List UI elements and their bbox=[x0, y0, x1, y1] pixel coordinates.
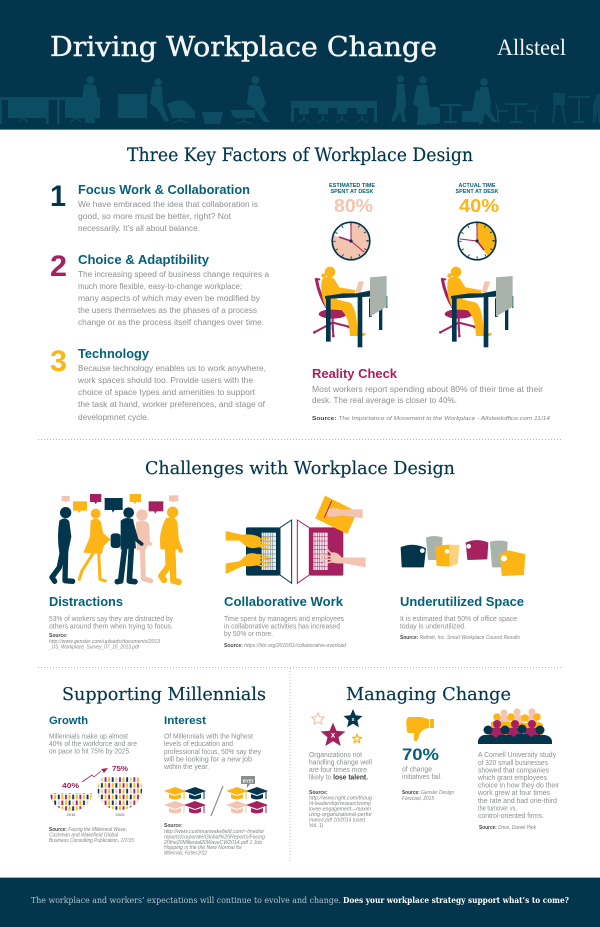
cornell text: choice in how they do their bbox=[478, 782, 560, 790]
interest text bbox=[163, 734, 261, 771]
70% figure: 70% bbox=[402, 745, 439, 764]
change initiatives panel bbox=[402, 717, 454, 802]
heading: three key factors: Three Key Factors of Workplace Design bbox=[127, 145, 473, 166]
illustration: laptops and hands bbox=[226, 496, 366, 583]
cornell text: A Cornell University study bbox=[478, 752, 556, 759]
change source: Forecast, 2015 bbox=[402, 796, 434, 802]
navy person one bbox=[52, 507, 73, 581]
underutilized text bbox=[400, 616, 517, 630]
factor 3 text: Because technology enables us to work anywhere, bbox=[78, 364, 266, 373]
navy person three bbox=[111, 507, 142, 582]
interest text: within the year. bbox=[163, 764, 209, 771]
talent source: Vol. 1) bbox=[309, 823, 324, 829]
interest source: 20the20Millenial20WaveCW2014.pdf 1 Job bbox=[163, 840, 262, 846]
change source bbox=[402, 790, 454, 802]
icon: thumbs down bbox=[406, 717, 434, 741]
factor 3 heading: Technology bbox=[78, 346, 150, 361]
growth source: Cushman and Wakefield Global bbox=[49, 832, 119, 838]
factor 3 text: work spaces should too. Provide users with the bbox=[77, 376, 254, 385]
factor 1 bbox=[50, 180, 258, 233]
distractions heading: Distractions bbox=[49, 594, 123, 609]
underutilized space panel bbox=[400, 537, 525, 641]
clock 40% bbox=[458, 222, 496, 260]
estimated label bbox=[329, 183, 376, 195]
underutilized text: It is estimated that 50% of office space bbox=[400, 616, 517, 623]
talent text bbox=[309, 752, 372, 782]
cornell text: of 320 small businesses bbox=[478, 760, 548, 767]
interest panel bbox=[163, 715, 268, 857]
cornell source: Source: Drive, Daniel Pink bbox=[479, 825, 536, 831]
growth text: 40% of the workforce and are bbox=[49, 741, 137, 748]
interest heading: Interest bbox=[164, 715, 206, 727]
number 3: 3 bbox=[50, 345, 67, 378]
growth source: Business Consulting Publication, 1/7/15 bbox=[49, 838, 134, 844]
collaborative source: Source: https://hbr.org/2016/01/collaborative-overload bbox=[224, 643, 346, 649]
factor 2 text: The increasing speed of business change requires a bbox=[78, 270, 270, 279]
distractions panel bbox=[48, 494, 181, 650]
reality check source: Source: The Importance of Movement in the Workplace - Allsteeloffice.com 11/14 bbox=[312, 416, 550, 422]
icon: stars bbox=[312, 709, 362, 746]
cornell text: the rate and had one-third bbox=[478, 798, 557, 805]
number 1: 1 bbox=[50, 180, 66, 213]
estimated label: SPENT AT DESK bbox=[330, 189, 374, 195]
chart: millennials share of workforce: 75% bbox=[112, 766, 129, 773]
talent source bbox=[309, 790, 372, 829]
factor 2 text bbox=[78, 270, 270, 327]
logo: Allsteel bbox=[497, 35, 566, 60]
factor 1 text: necessarily. It’s all about balance. bbox=[78, 224, 200, 233]
reality check text bbox=[312, 385, 543, 405]
reality check bbox=[312, 366, 550, 422]
chart: millennials share of workforce: 2016 bbox=[67, 812, 76, 817]
interest source: reports/corporate/Global%20Reports/Facing bbox=[164, 834, 265, 840]
collaborative text: Time spent by managers and employees bbox=[224, 616, 344, 623]
distractions source: http://www.gensler.com/uploads/documents/2013 bbox=[49, 639, 160, 645]
interest source: http://www.cushmanwakefield.com/~/media/ bbox=[164, 829, 265, 835]
distractions source bbox=[48, 633, 160, 650]
reality check text: Most workers report spending about 80% of their time at their bbox=[312, 385, 543, 394]
factor 2 text: many aspects of which may even be modified by bbox=[78, 294, 260, 303]
icon: graduation caps bbox=[164, 776, 268, 816]
footer band bbox=[0, 877, 600, 927]
estimated time panel bbox=[313, 183, 387, 347]
talent source: loyee-engagement---maxim bbox=[309, 806, 371, 812]
collaborative text: in collaborative activities has increased bbox=[224, 624, 340, 630]
cornell text: the turnover vs. bbox=[478, 806, 517, 812]
factor 1 text: We have embraced the idea that collaboration is bbox=[78, 200, 258, 209]
growth source bbox=[49, 827, 134, 844]
talent source: http://www.right.com/thoug bbox=[309, 796, 372, 802]
pink person bbox=[136, 509, 151, 581]
cornell text bbox=[477, 752, 560, 820]
change source: Source: Gensler Design bbox=[402, 790, 454, 796]
cornell text: control-oriented firms. bbox=[478, 813, 544, 820]
collaborative text bbox=[224, 616, 344, 638]
collaborative heading: Collaborative Work bbox=[224, 594, 344, 609]
talent text: are four times more bbox=[309, 767, 367, 774]
factor 1 text bbox=[78, 200, 258, 233]
icon: graduation caps: BYE! bbox=[243, 778, 254, 784]
illustration: furniture cubes bbox=[401, 537, 525, 575]
talent source: Source: bbox=[309, 790, 328, 796]
chart: millennials share of workforce: 2025 bbox=[116, 812, 125, 817]
growth text: Millennials make up almost bbox=[49, 734, 128, 740]
factor 2 text: change or as the process itself changes over time. bbox=[78, 318, 264, 327]
factor 3 text bbox=[77, 364, 266, 422]
factor 2 text: the users themselves as the phases of a process bbox=[78, 306, 257, 315]
heading: supporting millennials: Supporting Millennials bbox=[62, 684, 266, 705]
80% figure: 80% bbox=[334, 196, 373, 216]
talent text: handling change well bbox=[309, 760, 372, 766]
factor 2 heading: Choice & Adaptibility bbox=[78, 252, 210, 267]
icon: stars: x bbox=[331, 730, 336, 740]
talent source: izing-organizational-perfor bbox=[309, 812, 372, 818]
heading: challenges: Challenges with Workplace Design bbox=[145, 458, 455, 479]
factor 2 bbox=[50, 250, 270, 327]
change text bbox=[402, 766, 442, 781]
clock 80% bbox=[332, 222, 370, 260]
title: Driving Workplace Change bbox=[50, 31, 437, 63]
talent panel bbox=[309, 709, 372, 829]
cornell text: which grant employees bbox=[477, 775, 547, 782]
factor 3 text: choice of space types and amenities to support bbox=[78, 388, 256, 397]
orange person two bbox=[79, 509, 111, 581]
icon: crowd bbox=[478, 708, 552, 744]
growth text: on pace to hit 75% by 2025. bbox=[49, 748, 131, 756]
underutilized text: today is underutilized. bbox=[400, 624, 466, 630]
actual label: ACTUAL TIME bbox=[458, 183, 496, 189]
footer question: Does your workplace strategy support what’s to come? bbox=[343, 895, 569, 905]
underutilized heading: Underutilized Space bbox=[400, 594, 524, 609]
growth source: Source: Facing the Millennial Wave, bbox=[49, 827, 127, 833]
footer statement: The workplace and workers’ expectations will continue to evolve and change. bbox=[31, 896, 341, 905]
growth heading: Growth bbox=[49, 715, 88, 727]
factor 2 text: much more flexible, easy-to-change workplace; bbox=[78, 282, 242, 291]
talent text: Organizations not bbox=[309, 752, 362, 759]
interest text: will be looking for a new job bbox=[163, 756, 252, 764]
actual label: SPENT AT DESK bbox=[456, 189, 499, 195]
worker figure bbox=[439, 267, 513, 347]
header band bbox=[0, 0, 600, 130]
heading: managing change: Managing Change bbox=[346, 684, 511, 705]
cornell text: showed that companies bbox=[478, 768, 549, 774]
talent text: likely to lose talent. bbox=[309, 774, 368, 782]
change text: of change bbox=[402, 766, 432, 774]
distractions text: others around them when trying to focus. bbox=[49, 624, 173, 630]
chart: millennials share of workforce: 40% bbox=[62, 783, 80, 790]
factor 1 text: good, so more must be better, right? Not bbox=[78, 212, 232, 221]
distractions source: _US_Workplace_Survey_07_15_2013.pdf bbox=[48, 644, 140, 650]
interest text: professional focus, 50% say they bbox=[164, 749, 261, 756]
factor 1 heading: Focus Work & Collaboration bbox=[78, 182, 250, 197]
factor 3 text: developmnet cycle. bbox=[78, 413, 149, 422]
distractions source: Source: bbox=[49, 633, 68, 639]
actual time panel bbox=[439, 183, 513, 347]
interest source: Hopping is the the New Normal for bbox=[164, 845, 242, 851]
talent source: ht-leadership/research/emp bbox=[309, 801, 371, 807]
illustration: walking people with speech bubbles bbox=[52, 494, 181, 582]
growth text bbox=[49, 734, 137, 756]
reality check heading: Reality Check bbox=[312, 366, 398, 381]
factor 3 bbox=[50, 345, 266, 422]
icon: stars: x bbox=[351, 717, 355, 723]
40% figure: 40% bbox=[459, 196, 499, 216]
interest text: Of Millennials with the highest bbox=[164, 734, 253, 740]
change text: initiatives fail. bbox=[402, 774, 442, 781]
talent source: mance.pdf 10/2014 (used bbox=[309, 818, 365, 824]
interest source: Millennials, Forbes 2012 bbox=[164, 851, 207, 857]
interest source bbox=[163, 823, 265, 857]
collaborative work panel bbox=[224, 496, 366, 649]
distractions text bbox=[49, 616, 173, 630]
underutilized source: Source: Refinitr, Inc. Smart Workplace Council Results bbox=[400, 635, 520, 641]
factor 3 text: the task at hand, worker preferences, and stage of bbox=[78, 400, 266, 409]
reality check text: desk. The real average is closer to 40%. bbox=[312, 396, 457, 405]
office silhouettes bbox=[0, 75, 600, 125]
cornell text: work grew at four times bbox=[477, 790, 550, 797]
orange person five bbox=[160, 507, 181, 582]
actual label bbox=[456, 183, 499, 195]
distractions text: 53% of workers say they are distracted by bbox=[49, 616, 173, 623]
chart: millennials share of workforce bbox=[50, 766, 142, 817]
cornell study panel bbox=[477, 708, 560, 831]
estimated label: ESTIMATED TIME bbox=[329, 183, 376, 189]
collaborative text: by 50% or more. bbox=[224, 631, 273, 638]
interest text: levels of education and bbox=[164, 741, 233, 748]
growth panel bbox=[49, 715, 142, 844]
worker figure bbox=[313, 267, 387, 347]
number 2: 2 bbox=[50, 250, 67, 283]
interest source: Source: bbox=[164, 823, 183, 829]
